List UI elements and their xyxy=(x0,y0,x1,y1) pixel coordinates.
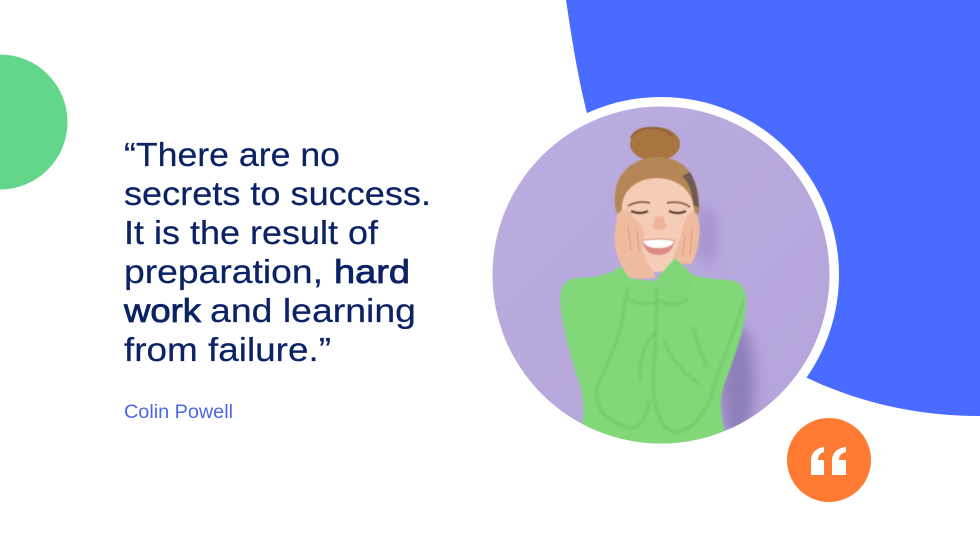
right cuff xyxy=(657,258,680,280)
hair bun xyxy=(630,127,680,161)
quote text: from failure.” xyxy=(124,331,331,368)
green half circle xyxy=(0,54,68,190)
right hand xyxy=(673,211,700,264)
quote text: It is the result of xyxy=(124,214,379,251)
quote text: “There are no xyxy=(124,136,340,173)
photo circle xyxy=(490,100,835,450)
sweater folds xyxy=(596,285,744,432)
orange quote badge xyxy=(787,418,871,502)
quote text xyxy=(123,136,431,368)
attribution: Colin Powell xyxy=(124,402,233,423)
eyebrows xyxy=(628,202,690,207)
quote text: work xyxy=(123,292,202,329)
quote text: hard xyxy=(334,253,410,290)
mouth xyxy=(642,238,675,255)
nose xyxy=(652,216,667,230)
eyes xyxy=(631,211,686,213)
blue blob shape xyxy=(566,0,980,416)
quote text: preparation, xyxy=(124,253,323,290)
sweater xyxy=(560,258,746,450)
person xyxy=(560,127,746,450)
left hand xyxy=(615,210,655,279)
white ring xyxy=(483,97,839,453)
hair xyxy=(615,157,699,214)
quote text: and learning xyxy=(210,292,416,329)
icon: quotation marks xyxy=(811,447,846,475)
quote text: secrets to success. xyxy=(124,175,431,212)
face xyxy=(622,178,694,272)
